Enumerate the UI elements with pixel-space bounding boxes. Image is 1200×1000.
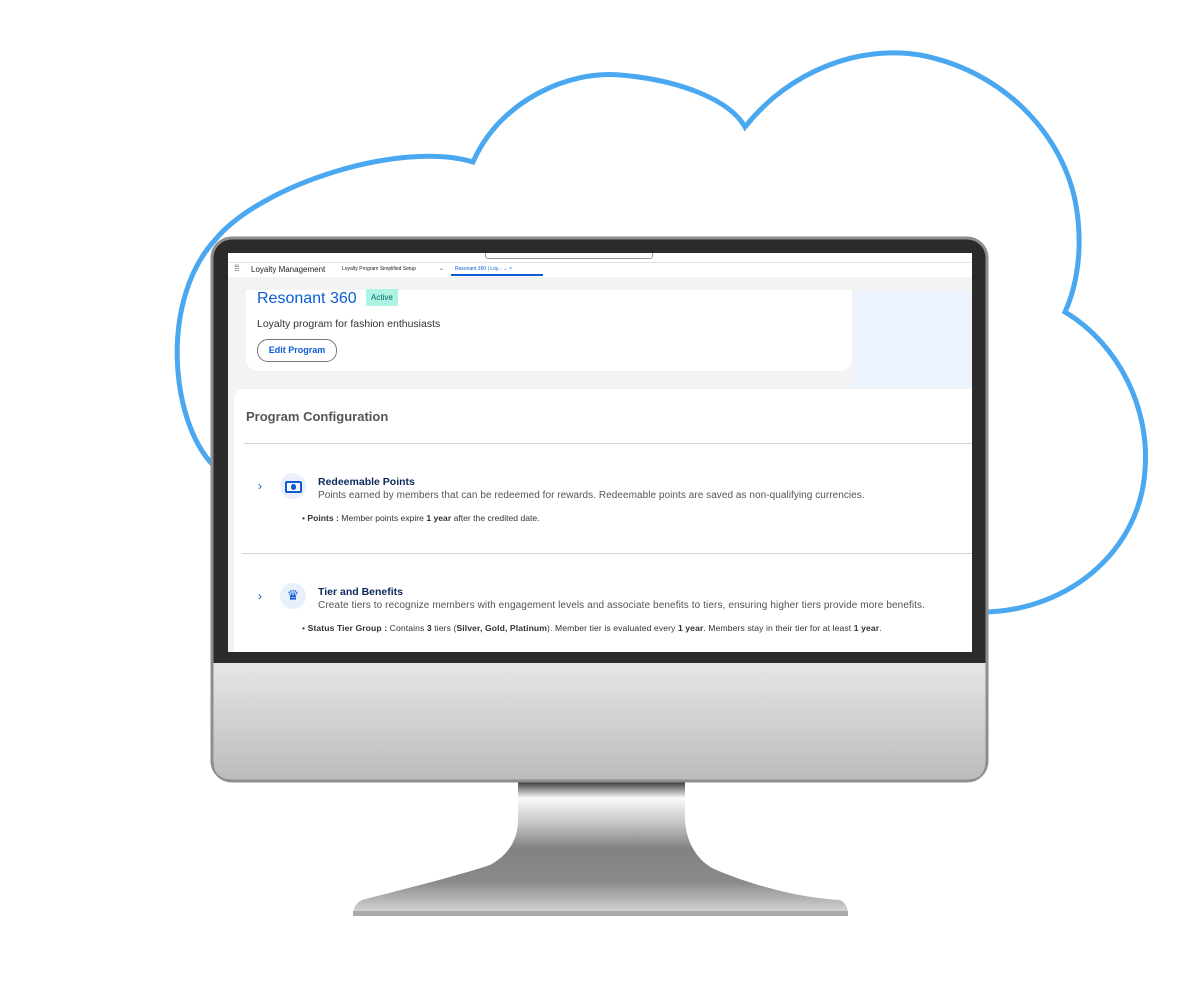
tier and benefits: ♛ [287,587,299,603]
program card [246,290,852,371]
top header [228,253,972,263]
tab bar: ⁞⁞⁞ [234,263,239,273]
tier and benefits: › [258,589,262,603]
tier and benefits: Create tiers to recognize members with engagement levels and associate benefits to tiers, ensuring higher tiers provide more benefits. [318,600,925,611]
tab bar: Loyalty Program Simplified Setup [342,266,416,272]
program card: Active [371,293,393,302]
redeemable points: Redeemable Points [318,476,415,488]
redeemable points: Points earned by members that can be redeemed for rewards. Redeemable points are saved as non-qualifying currencies. [318,490,865,501]
tier and benefits [258,583,925,633]
program card: Edit Program [269,345,325,355]
monitor body [212,238,987,781]
tab bar: Resonant 360 | Loy... ⌄ × [455,266,512,272]
tab bar: ⌄ [439,266,444,272]
config panel [234,389,972,659]
tab bar [228,263,972,277]
screen [228,253,972,652]
config panel: Program Configuration [246,409,388,424]
program card: Loyalty program for fashion enthusiasts [257,318,440,330]
tab bar: Loyalty Management [251,265,325,274]
tier and benefits: Tier and Benefits [318,586,403,598]
redeemable points: • Points : Member points expire 1 year after the credited date. [302,513,540,523]
program card: Resonant 360 [257,290,357,307]
tier and benefits: • Status Tier Group : Contains 3 tiers (Silver, Gold, Platinum). Member tier is evaluated every 1 year. Members stay in their tier for at least 1 year. [302,623,882,633]
redeemable points [258,473,865,523]
right blue area [852,290,972,388]
redeemable points: › [258,479,262,493]
